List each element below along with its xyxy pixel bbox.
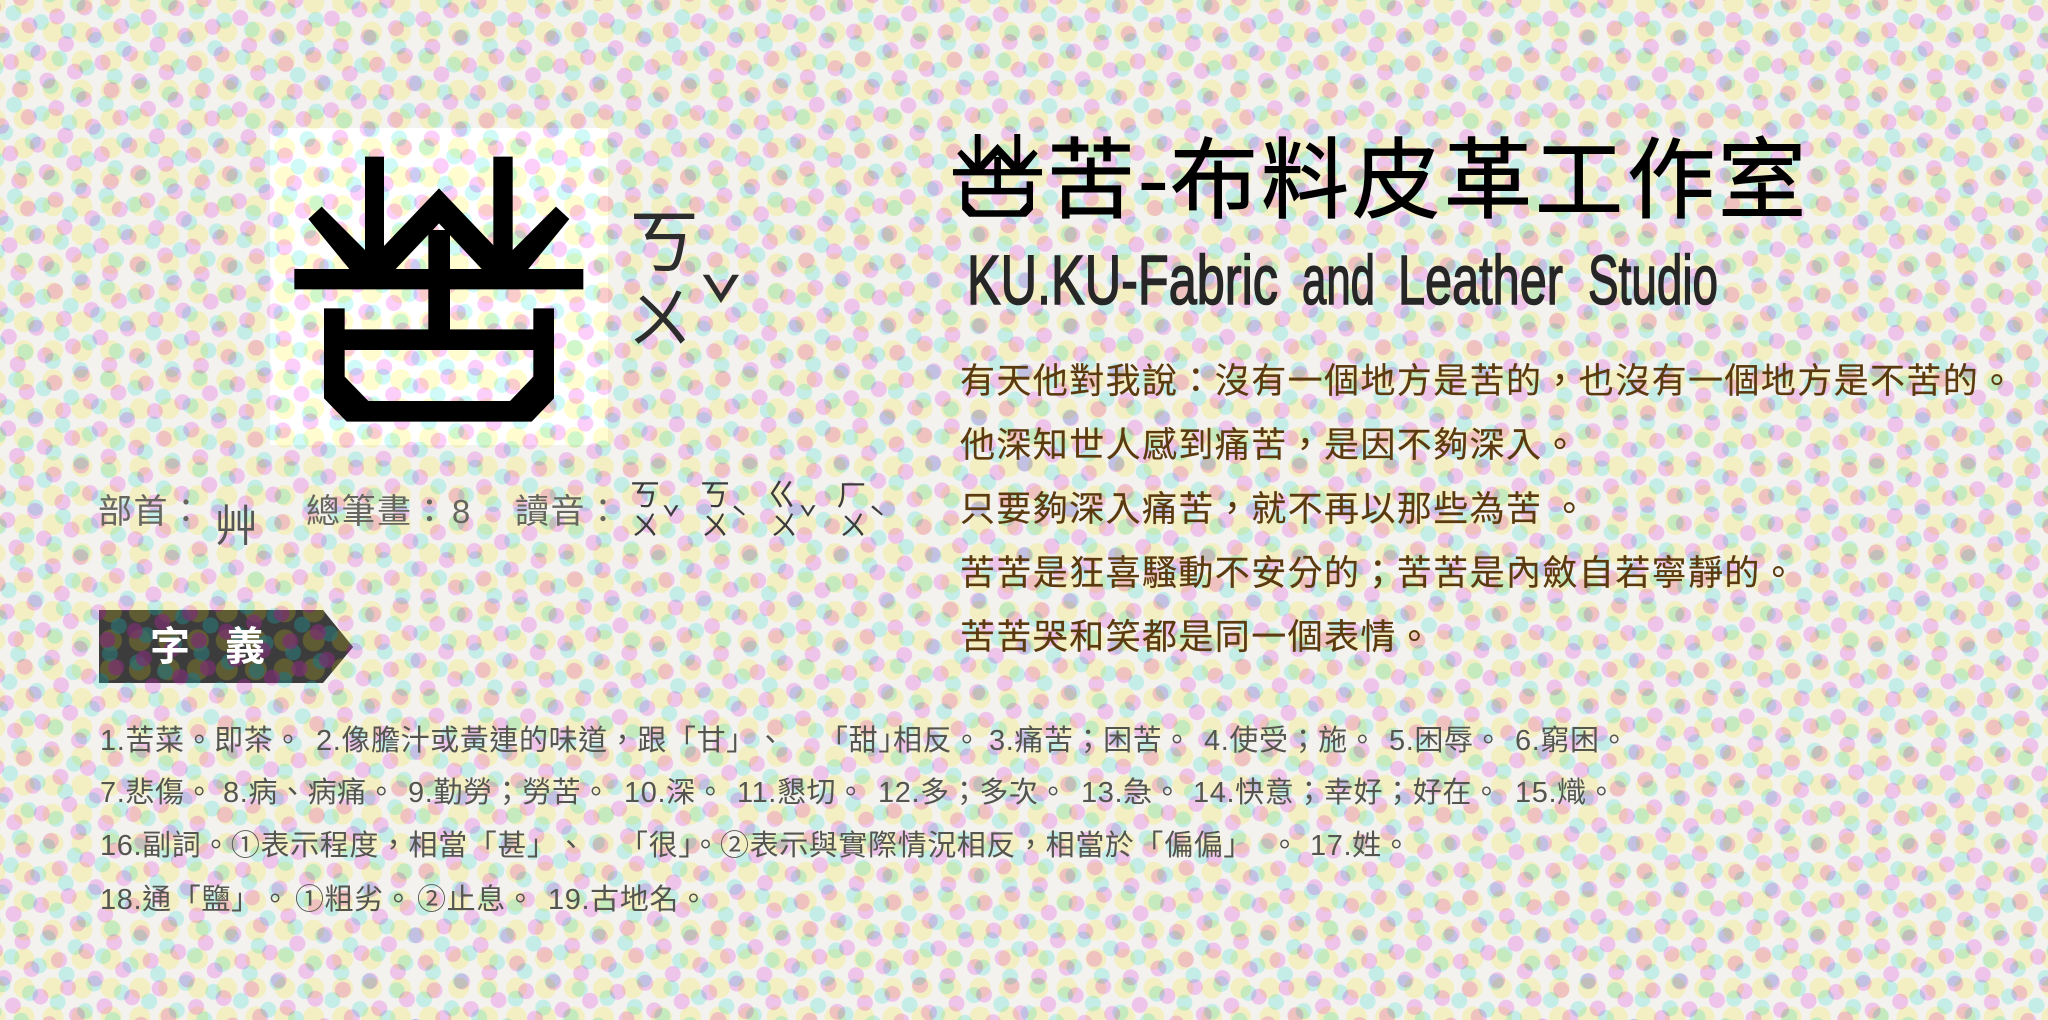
small phonetic readings: ㄍ [766, 470, 798, 515]
subtitle: English studio name: Studio [1588, 241, 1718, 319]
body text: poem paragraph: 有天他對我說：沒有一個地方是苦的，也沒有一個地方是不苦的。 [960, 353, 2016, 404]
definitions list: 13.急。 [1081, 776, 1182, 809]
definitions list: ②止息。 [417, 883, 535, 916]
definitions list: 1.苦菜。即茶。 [100, 724, 303, 757]
subtitle: English studio name: Leather [1398, 241, 1563, 319]
radical, stroke count and readings row: 讀音： [515, 484, 622, 533]
body text: poem paragraph: 他深知世人感到痛苦，是因不夠深入。 [960, 417, 1579, 468]
definitions list: ②表示與實際情況相反，相當於「偏偏」 [720, 829, 1253, 862]
body text: poem paragraph: 苦苦是狂喜騷動不安分的；苦苦是內斂自若寧靜的。 [960, 545, 1797, 596]
icon: small logo character in title [953, 134, 1042, 217]
definitions list: 8.病、病痛。 [223, 776, 396, 809]
definitions list: 5.困辱。 [1389, 725, 1503, 757]
definitions list: 2.像膽汁或黃連的味道，跟「甘」、 [316, 724, 785, 757]
small phonetic readings: ㄎ [630, 470, 660, 515]
radical, stroke count and readings row: 艸 [214, 490, 258, 554]
definitions list: 。 [691, 830, 721, 862]
body text: poem paragraph: 只要夠深入痛苦，就不再以那些為苦 。 [960, 481, 1588, 532]
heading banner: meaning [99, 610, 353, 683]
definitions list: 18.通「鹽」。 [100, 883, 290, 916]
definitions list: 相反。 [893, 724, 982, 757]
large phonetic reading [627, 184, 743, 362]
definitions list: 12.多；多次。 [878, 776, 1068, 809]
definitions list: 10.深。 [624, 777, 725, 809]
radical, stroke count and readings row: 8 [452, 493, 470, 530]
definitions list: 3.痛苦；困苦。 [989, 724, 1192, 757]
body text: poem paragraph: 苦苦哭和笑都是同一個表情。 [960, 609, 1433, 660]
body text: poem paragraph [960, 353, 2016, 660]
small phonetic readings: ㄏ [836, 470, 868, 515]
definitions list [100, 724, 1629, 916]
definitions list: 17.姓。 [1310, 829, 1411, 862]
small phonetic readings: ˋ [730, 495, 748, 539]
small phonetic readings: ㄎ [700, 470, 730, 515]
large phonetic reading: ˇ [699, 250, 743, 355]
subtitle: English studio name: KU.KU-Fabric [967, 241, 1278, 319]
radical, stroke count and readings row: 總筆畫： [306, 484, 448, 533]
definitions list: 6.窮困。 [1515, 724, 1629, 757]
definitions list: ①粗劣。 [295, 883, 413, 916]
subtitle: English studio name [967, 241, 1718, 319]
definitions list: 15.熾。 [1515, 776, 1616, 809]
definitions list: 4.使受；施。 [1204, 724, 1377, 757]
small phonetic readings: ˇ [662, 495, 680, 539]
radical, stroke count and readings row [98, 484, 622, 554]
small phonetic readings: ˇ [799, 495, 817, 539]
definitions list: 19.古地名。 [548, 883, 709, 916]
radical, stroke count and readings row: 部首： [98, 484, 204, 533]
large phonetic reading: ㄨ [627, 266, 693, 362]
definitions list: 「甜」 [819, 725, 908, 757]
definitions list: 7.悲傷。 [100, 776, 214, 809]
definitions list: 14.快意；幸好；好在。 [1193, 776, 1502, 809]
heading banner: meaning: 字 [150, 614, 190, 672]
large phonetic reading: ㄎ [628, 184, 700, 289]
title: Chinese studio name: 苦-布料皮革工作室 [1047, 110, 1806, 237]
definitions list: 「很」 [619, 829, 708, 862]
definitions list: 。 [1270, 830, 1300, 862]
definitions list: 11.懇切。 [737, 776, 866, 809]
small phonetic readings: ˋ [868, 495, 886, 539]
subtitle: English studio name: and [1302, 241, 1375, 319]
small phonetic readings: ㄨ [839, 504, 867, 544]
small phonetic readings: ㄨ [701, 504, 729, 544]
small phonetic readings: ㄨ [770, 504, 798, 544]
small phonetic readings [630, 470, 886, 544]
definitions list: 16.副詞。①表示程度，相當「甚」、 [100, 829, 586, 862]
definitions list: 9.勤勞；勞苦。 [408, 776, 611, 809]
small phonetic readings: ㄨ [631, 504, 659, 544]
heading banner: meaning: 義 [225, 614, 265, 672]
icon: large studio logo character [294, 157, 583, 422]
